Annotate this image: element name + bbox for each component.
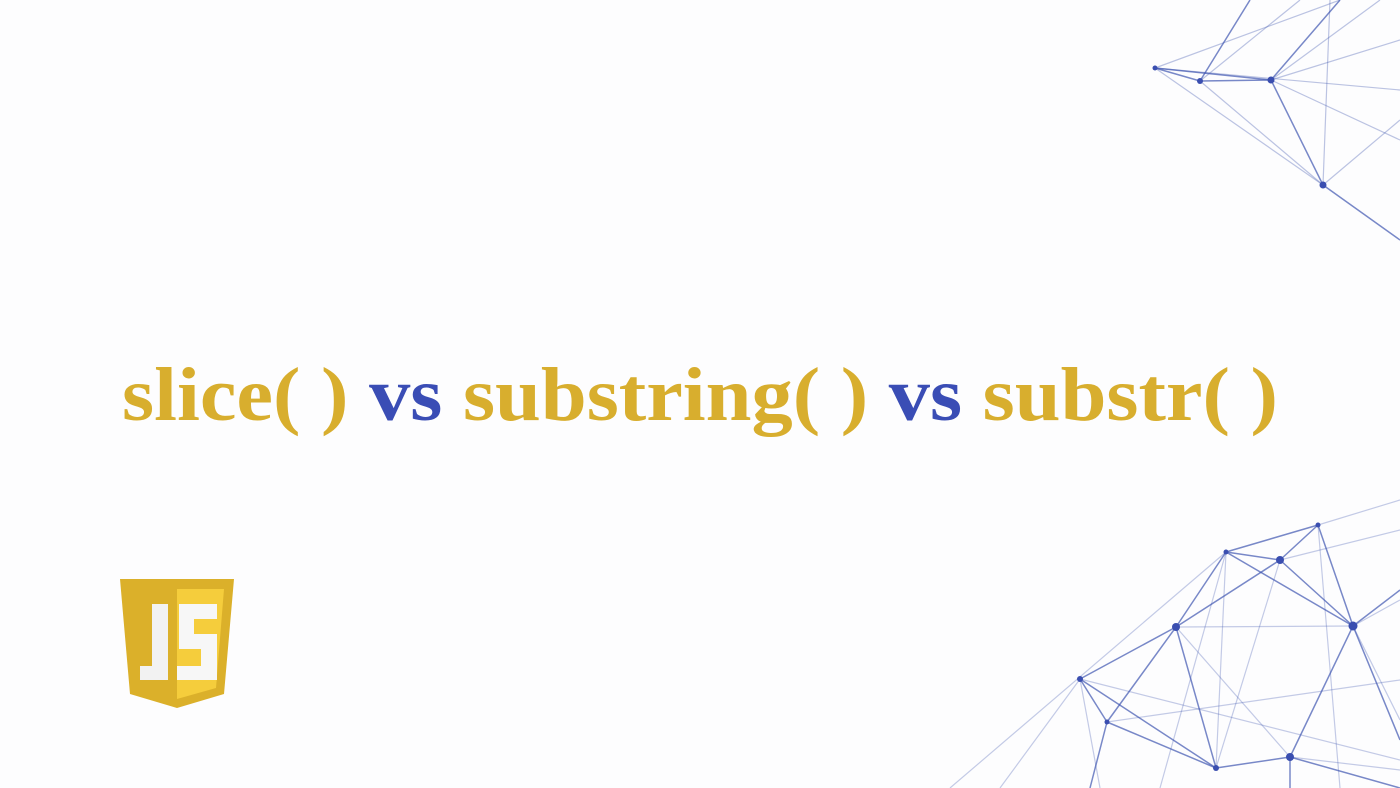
title: slice( ) vs substring( ) vs substr( ) — [122, 353, 1278, 437]
network: top right — [1155, 0, 1400, 240]
network nodes top right — [1152, 66, 1326, 188]
icon: JS logo — [120, 579, 234, 708]
network nodes bottom right — [1077, 522, 1358, 771]
network: bottom right — [950, 500, 1400, 788]
